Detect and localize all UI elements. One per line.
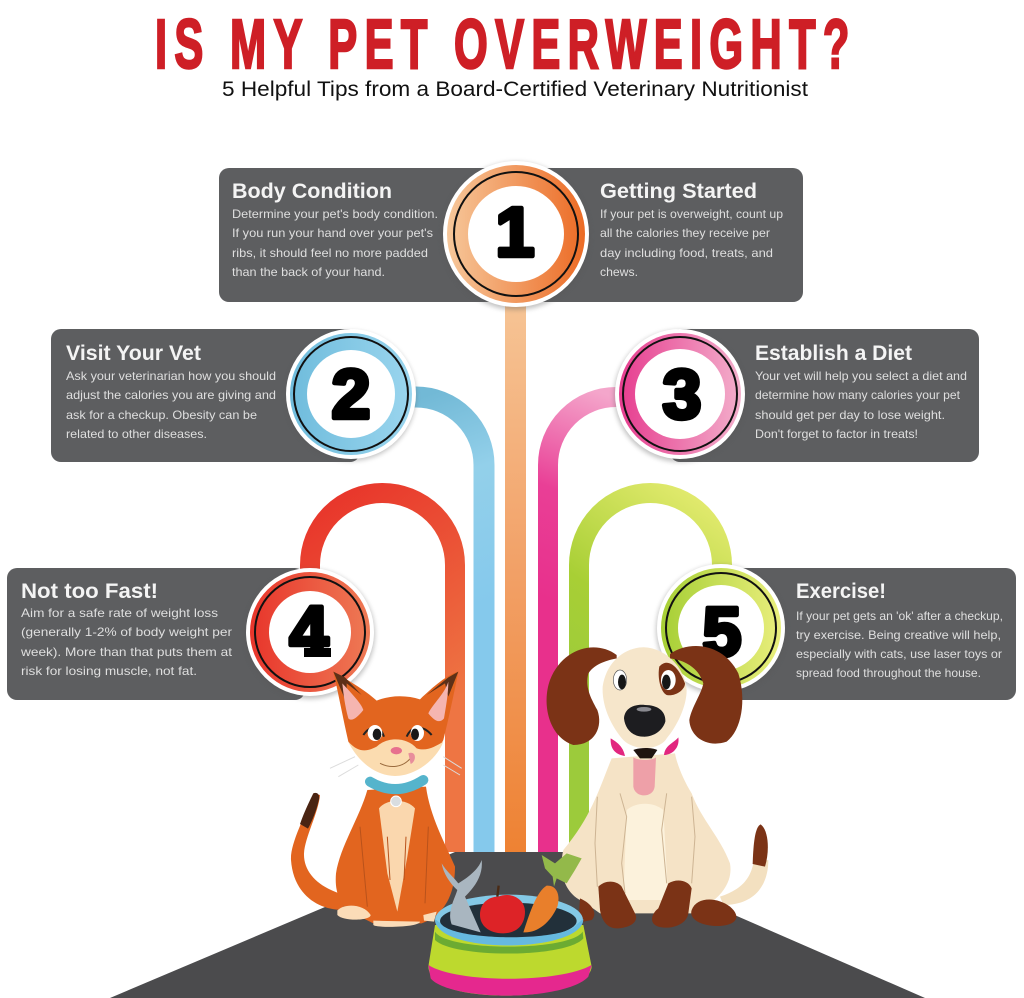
heading: getting started: Getting Started <box>600 180 757 203</box>
text: Your vet will help you select a diet and <box>755 369 967 383</box>
badge 3 <box>614 329 746 462</box>
badge 5 <box>656 564 786 695</box>
text: Don't forget to factor in treats! <box>755 427 918 441</box>
badge 5: 5 <box>703 593 741 671</box>
badge 3: 3 <box>663 355 701 433</box>
icon: apple <box>480 886 525 933</box>
pipe: tip 4 red <box>310 493 455 852</box>
text: related to other diseases. <box>66 427 207 441</box>
text: should get per day to lose weight. <box>755 408 945 422</box>
icon: fish <box>442 860 482 932</box>
text: body condition <box>232 207 438 279</box>
cat <box>291 672 462 927</box>
bowl rim front <box>435 919 583 945</box>
floor <box>110 852 925 998</box>
text <box>66 369 276 441</box>
text <box>755 369 967 441</box>
text: body condition: If you run your hand over your pet's <box>232 226 433 240</box>
panel: establish a diet <box>670 329 979 462</box>
badge 4 <box>245 568 375 699</box>
icon: carrot <box>523 853 582 932</box>
text: body condition: than the back of your hand. <box>232 265 385 279</box>
text <box>796 609 1003 680</box>
text: (generally 1-2% of body weight per <box>21 625 232 639</box>
title: IS MY PET OVERWEIGHT? <box>155 5 849 84</box>
badge 1 <box>442 161 590 310</box>
dog <box>547 646 768 928</box>
text <box>20 606 233 678</box>
text: getting started: If your pet is overweight, count up <box>600 207 783 221</box>
panel: tips 1 <box>219 168 803 302</box>
text: Ask your veterinarian how you should <box>66 369 276 383</box>
text: getting started: all the calories they receive per <box>600 226 770 240</box>
heading: Visit Your Vet <box>66 342 201 365</box>
text: getting started: chews. <box>600 265 638 279</box>
badge 2 <box>286 329 416 461</box>
heading: Not too Fast! <box>21 580 158 603</box>
pipe: tip 2 blue <box>412 397 484 852</box>
badge 2: 2 <box>332 355 370 433</box>
panel: exercise <box>710 568 1016 700</box>
text: especially with cats, use laser toys or <box>796 647 1002 661</box>
pipe: tip 3 pink <box>548 397 622 852</box>
heading: body condition: Body Condition <box>232 180 392 203</box>
text: Aim for a safe rate of weight loss <box>21 606 218 620</box>
text: determine how many calories your pet <box>755 388 961 402</box>
bowl body <box>428 925 592 996</box>
pipe: tip 1 orange <box>505 296 526 852</box>
text: getting started: day including food, treats, and <box>600 246 773 260</box>
text: week). More than that puts them at <box>20 645 233 659</box>
pipe: tip 5 green <box>579 493 722 852</box>
panel: not too fast <box>7 568 305 700</box>
text: try exercise. Being creative will help, <box>796 628 1001 642</box>
panel: visit your vet <box>51 329 360 462</box>
bowl rim back <box>435 895 583 945</box>
heading: Exercise! <box>796 580 886 603</box>
text: body condition: ribs, it should feel no more padded <box>232 246 428 260</box>
text: body condition: Determine your pet's body condition. <box>232 207 438 221</box>
text: risk for losing muscle, not fat. <box>21 664 197 678</box>
text: ask for a checkup. Obesity can be <box>66 408 257 422</box>
heading: Establish a Diet <box>755 342 912 365</box>
text: spread food throughout the house. <box>796 666 981 680</box>
subtitle: 5 Helpful Tips from a Board-Certified Veterinary Nutritionist <box>222 78 808 101</box>
text: adjust the calories you are giving and <box>66 388 276 402</box>
text: If your pet gets an 'ok' after a checkup, <box>796 609 1003 623</box>
badge 1: 1 <box>496 193 534 271</box>
badge 4: 4 <box>290 592 329 670</box>
text: getting started <box>600 207 783 279</box>
bowl with food <box>428 853 592 996</box>
